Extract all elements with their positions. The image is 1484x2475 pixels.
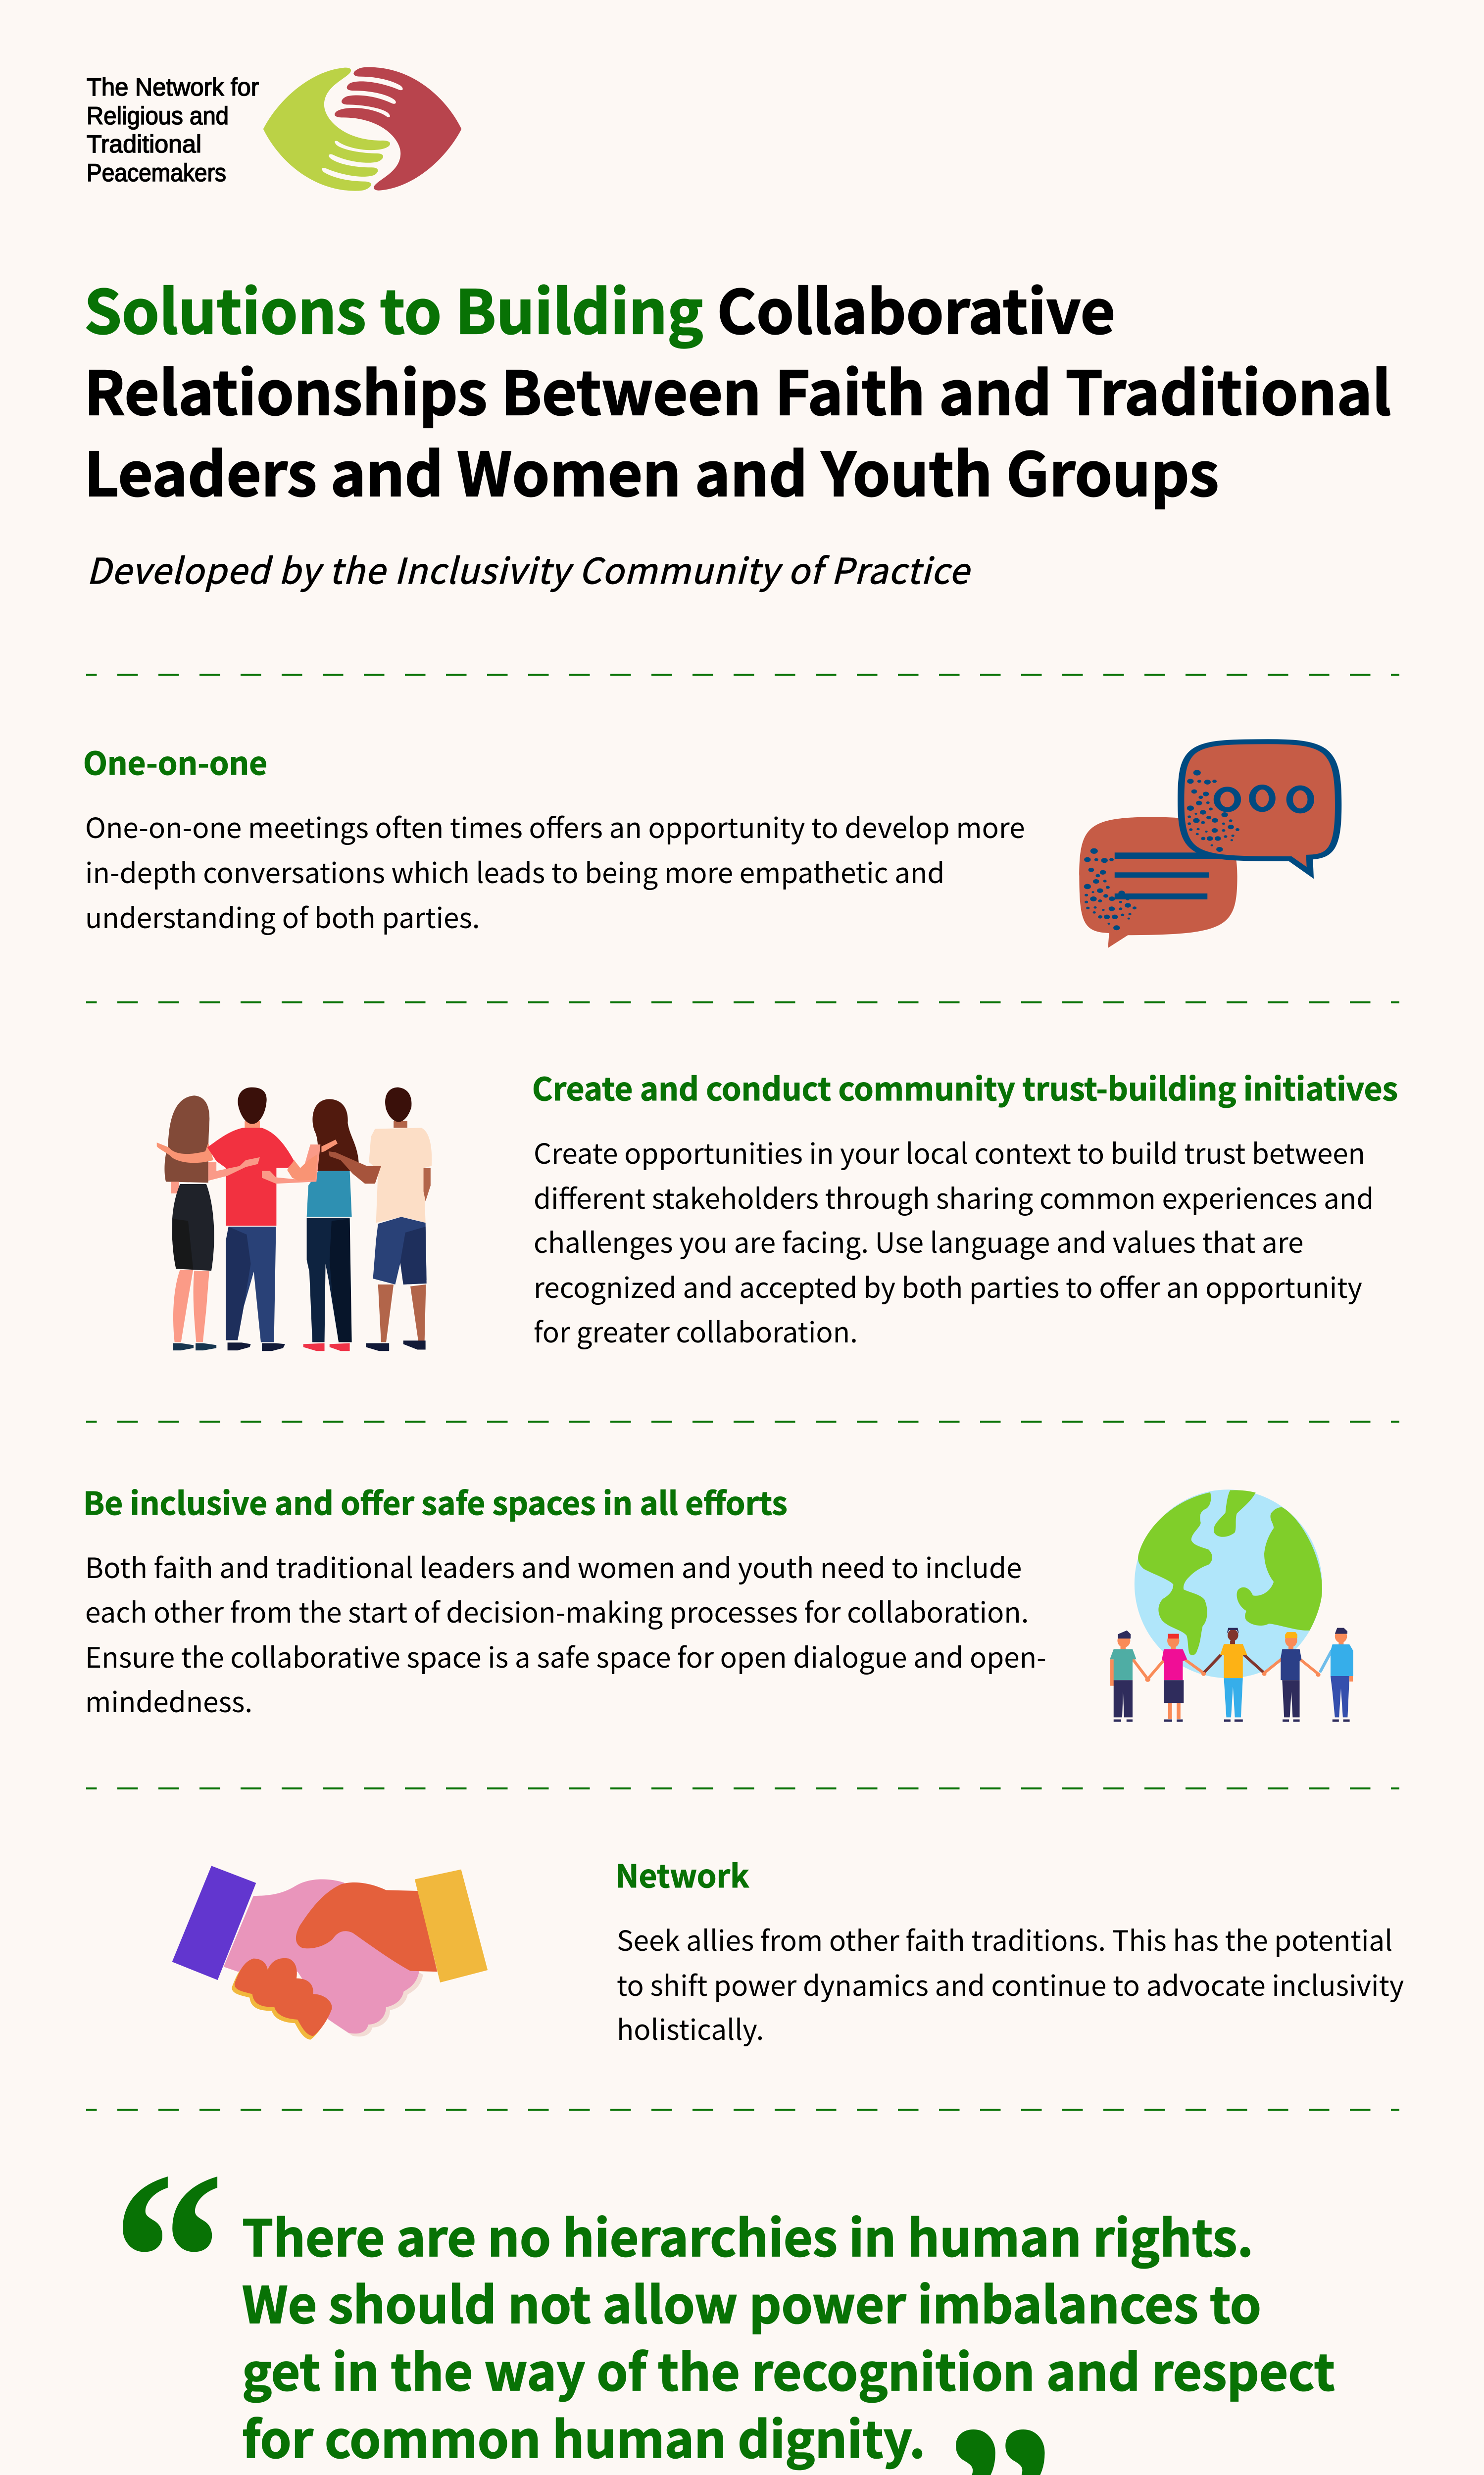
callout: quote text: get in the way of the recognition and respect bbox=[242, 2333, 1335, 2405]
text block: inclusive and safe spaces: mindedness. bbox=[85, 1680, 252, 1721]
title: Relationships Between Faith and Traditional bbox=[84, 345, 1391, 432]
person 4 bbox=[1281, 1632, 1301, 1722]
heading: community trust-building: Create and conduct community trust-building initiatives bbox=[532, 1064, 1398, 1110]
text block: community trust-building: challenges you are facing. Use language and values that are bbox=[534, 1221, 1303, 1261]
person 3 bbox=[1220, 1628, 1247, 1722]
person 1 bbox=[1110, 1631, 1137, 1722]
person 5 bbox=[1331, 1628, 1353, 1722]
panel: one-on-one bbox=[83, 739, 1338, 948]
text block: community trust-building: different stakeholders through sharing common experiences and bbox=[534, 1177, 1374, 1217]
text block: community trust-building: recognized and accepted by both parties to offer an opportunity bbox=[534, 1266, 1362, 1306]
logo: organisation name and clasped hands mark bbox=[87, 67, 461, 191]
title: Solutions to Building Collaborative bbox=[84, 264, 1115, 351]
icon: speech bubbles bbox=[1079, 742, 1338, 948]
text block: network: holistically. bbox=[617, 2008, 764, 2048]
logo wordmark: Religious and bbox=[87, 102, 229, 130]
heading: inclusive and safe spaces: Be inclusive and offer safe spaces in all efforts bbox=[83, 1479, 788, 1524]
subtitle: Developed by the Inclusivity Community of Practice bbox=[87, 544, 972, 594]
heading: network: Network bbox=[615, 1851, 749, 1897]
text block: one-on-one bbox=[85, 806, 1025, 937]
logo wordmark: The Network for bbox=[87, 73, 259, 101]
illustration: globe and five people holding hands bbox=[1110, 1489, 1353, 1722]
text block: network: Seek allies from other faith traditions. This has the potential bbox=[617, 1919, 1392, 1959]
text block: community trust-building: for greater collaboration. bbox=[534, 1310, 858, 1351]
text block: inclusive and safe spaces: Ensure the collaborative space is a safe space for open dialogue and open- bbox=[85, 1635, 1046, 1676]
person 2 bbox=[1162, 1634, 1187, 1722]
text block: inclusive and safe spaces: each other from the start of decision-making processes for collaboration. bbox=[85, 1590, 1029, 1631]
title: Leaders and Women and Youth Groups bbox=[84, 426, 1219, 513]
logo wordmark: Peacemakers bbox=[87, 159, 226, 187]
text block: one-on-one: One-on-one meetings often times offers an opportunity to develop more bbox=[85, 806, 1025, 846]
callout: quote text: for common human dignity. bbox=[242, 2400, 926, 2473]
illustration: four friends embracing bbox=[157, 1088, 432, 1351]
callout: quote text: There are no hierarchies in human rights. bbox=[242, 2199, 1253, 2271]
text block: community trust-building: Create opportunities in your local context to build trust between bbox=[534, 1132, 1365, 1172]
callout: quote text: We should not allow power imbalances to bbox=[242, 2266, 1261, 2338]
panel: community trust-building bbox=[157, 1064, 1398, 1351]
icon: clasped hands bbox=[263, 67, 461, 191]
text block: one-on-one: understanding of both parties. bbox=[85, 896, 480, 937]
text block: one-on-one: in-depth conversations which leads to being more empathetic and bbox=[85, 851, 944, 891]
panel: inclusive and safe spaces bbox=[83, 1479, 1353, 1722]
text block: inclusive and safe spaces: Both faith and traditional leaders and women and youth need to include bbox=[85, 1546, 1022, 1586]
text block: community trust-building bbox=[534, 1132, 1374, 1351]
text block: inclusive and safe spaces bbox=[85, 1546, 1046, 1721]
text block: network bbox=[617, 1919, 1404, 2048]
title bbox=[84, 264, 1391, 513]
callout: quote text bbox=[242, 2199, 1335, 2473]
panel: network bbox=[172, 1851, 1404, 2048]
logo wordmark bbox=[87, 73, 259, 187]
logo wordmark: Traditional bbox=[87, 130, 201, 158]
illustration: handshake bbox=[172, 1866, 488, 2040]
text block: network: to shift power dynamics and continue to advocate inclusivity bbox=[617, 1964, 1404, 2004]
heading: one-on-one: One-on-one bbox=[83, 739, 267, 784]
